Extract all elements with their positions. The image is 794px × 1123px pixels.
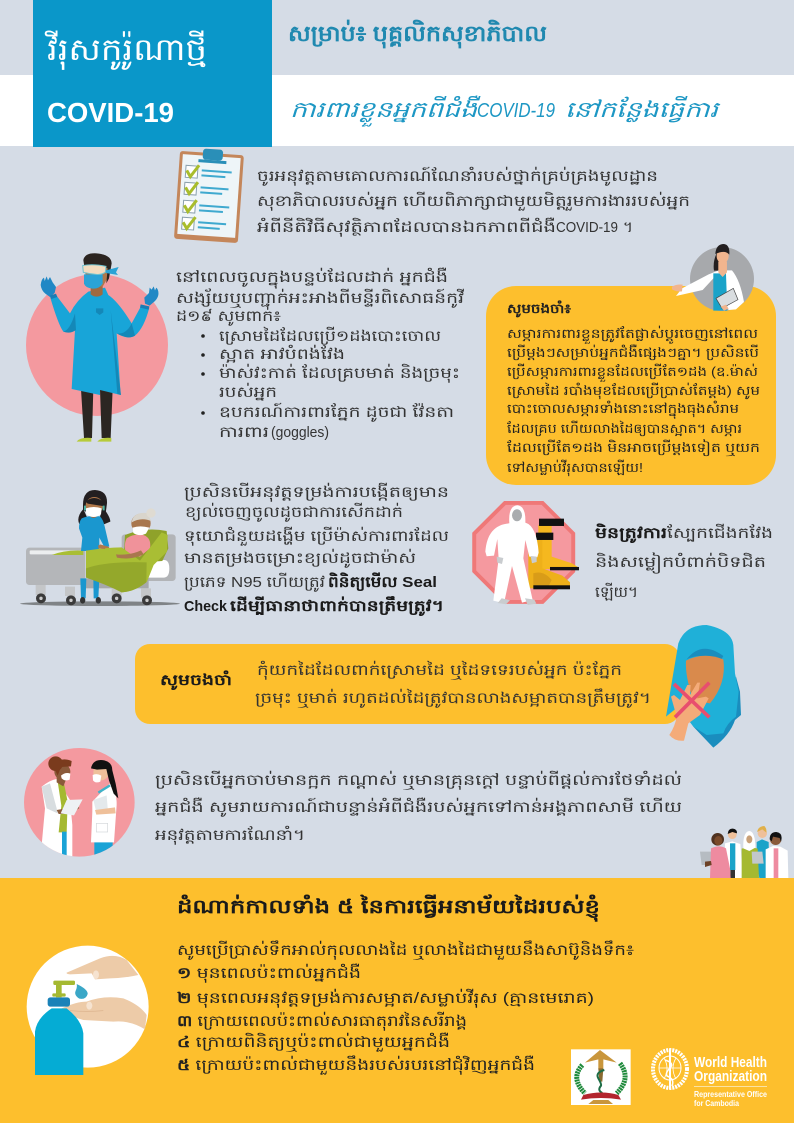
- illustration: woman touching face crossed out: [666, 625, 741, 748]
- bullet list: protective equipment: ការពារ: [219, 424, 269, 441]
- moments list: ២ មុនពេលអនុវត្តទម្រង់ការសម្អាត/សម្លាប់វីរុស (គ្មានមេរោគ): [177, 988, 594, 1008]
- logo: World Health Organization: [653, 1049, 767, 1108]
- bullet list: protective equipment: របស់អ្នក: [219, 382, 277, 401]
- text block: aerosol generating procedures: Check: [184, 598, 228, 615]
- subtitle: protect yourself at work: ការពារខ្លួនអ្នកពីជំងឺ: [290, 95, 481, 127]
- callout text: ស្រោមដៃ របាំងមុខដែលប្រើប្រាស់តែម្តង) សូម: [507, 382, 760, 400]
- title panel: [33, 0, 272, 147]
- text block: aerosol generating procedures: ដើម្បីធានាថាពាក់បានត្រឹមត្រូវ។: [230, 596, 444, 617]
- moments list: ៤ ក្រោយពិនិត្យឬប៉ះពាល់ជាមួយអ្នកជំងឺ: [177, 1032, 450, 1052]
- text block: follow guidance: ។: [623, 219, 633, 236]
- bullet list: protective equipment: ឧបករណ៍ការពារភ្នែក ដូចជា វ៉ែនតា: [219, 402, 454, 422]
- text block: follow guidance: សុខាភិបាលរបស់អ្នក ហើយពិភាក្សាជាមួយមិត្តរួមការងាររបស់អ្នក: [257, 191, 690, 211]
- subtitle: protect yourself at work: [290, 95, 720, 127]
- text block: entering the room: ដ១៩ សូមពាក់៖: [176, 306, 281, 326]
- callout text: ច្រមុះ ឬមាត់ រហូតដល់ដៃត្រូវបានលាងសម្អាតបានត្រឹមត្រូវ។: [255, 688, 651, 708]
- illustration: health worker in gown: [26, 253, 168, 442]
- logo: Ministry of Health: [571, 1049, 631, 1105]
- title: new coronavirus: វីរុសកូរ៉ូណាថ្មី: [45, 30, 207, 70]
- subtitle: protect yourself at work: COVID-19: [477, 100, 555, 122]
- callout text: ប្រើសម្ភារការពារខ្លួនដែលប្រើតែ១ដង (ឧ.ម៉ាស់: [507, 363, 758, 382]
- callout text: ដែលប្រើតែ១ដង មិនអាចប្រើម្តងទៀត ឬយក: [507, 439, 760, 457]
- bullet list: protective equipment: (goggles): [271, 424, 329, 441]
- text block: aerosol generating procedures: ប្រសិនបើអនុវត្តទម្រង់ការបង្កើតឲ្យមាន: [184, 482, 449, 502]
- illustration: hand sanitizer: [27, 946, 149, 1075]
- logo: World Health Organization: World Health: [694, 1054, 767, 1071]
- title: COVID-19: COVID-19: [47, 97, 174, 128]
- bullet list: protective equipment: ម៉ាស់វះកាត់ ដែលគ្របមាត់ និងច្រមុះ: [219, 363, 460, 383]
- subtitle: audience: សម្រាប់៖ បុគ្គលិកសុខាភិបាល: [288, 19, 547, 49]
- subtitle: protect yourself at work: នៅកន្លែងធ្វើការ: [565, 96, 720, 123]
- logo: World Health Organization: Organization: [694, 1068, 767, 1085]
- bullet list: protective equipment: ស្អាត អាវបំពង់វែង: [219, 344, 345, 363]
- callout label: សូមចងចាំ: [160, 670, 232, 691]
- icon: clipboard checklist: [174, 147, 244, 243]
- illustration: group of health workers: [700, 826, 788, 878]
- text block: aerosol generating procedures: ប្រភេទ N95 ហើយត្រូវ: [184, 572, 325, 592]
- moments list: ៥ ក្រោយប៉ះពាល់ជាមួយនឹងរបស់របរនៅជុំវិញអ្នកជំងឺ: [177, 1055, 535, 1075]
- callout text: សម្ភារការពារខ្លួនត្រូវតែផ្លាស់ប្តូរចេញនៅពេល: [507, 325, 758, 344]
- moments list: ៣ ក្រោយពេលប៉ះពាល់សារធាតុរាវនៃសរីរាង្គ: [177, 1011, 467, 1031]
- footer heading: five moments of hand hygiene: ដំណាក់កាលទាំង ៥ នៃការធ្វើអនាម័យដៃរបស់ខ្ញុំ: [177, 894, 600, 922]
- text block: follow guidance: អំពីនីតិវិធីសុវត្ថិភាពដែលបានឯកភាពពីជំងឺ: [257, 217, 556, 237]
- callout heading: សូមចងចាំ៖: [507, 300, 571, 318]
- logo: World Health Organization: Representative Office: [694, 1090, 767, 1099]
- text block: no boots or coverall: មិនត្រូវការ: [595, 523, 667, 544]
- callout text: ប្រើម្តងៗសម្រាប់អ្នកជំងឺផ្សេងៗគ្នា។ ប្រសិនបើ: [507, 344, 759, 361]
- callout text: ដែលគ្រប ហើយលាងដៃឲ្យបានស្អាត។ សម្ភារ: [507, 420, 742, 437]
- text block: entering the room: សង្ស័យឬបញ្ជាក់អះអាងពីមន្ទីរពិសោធន៍កូវី: [176, 288, 464, 308]
- text block: no boots or coverall: [595, 523, 773, 601]
- callout text: [507, 325, 760, 477]
- text block: follow guidance: [257, 166, 690, 237]
- text block: report symptoms: អ្នកជំងឺ សូមរាយការណ៍ជាបន្ទាន់អំពីជំងឺរបស់អ្នកទៅកាន់អង្គភាពសាមី ហើយ: [155, 797, 682, 817]
- illustration: two health workers: [24, 748, 135, 860]
- text block: report symptoms: [155, 770, 682, 845]
- text block: follow guidance: ចូរអនុវត្តតាមគោលការណ៍ណែនាំរបស់ថ្នាក់គ្រប់គ្រងមូលដ្ឋាន: [257, 166, 658, 186]
- text block: aerosol generating procedures: មានតម្រងចម្រោះខ្យល់ដូចជាម៉ាស់: [184, 548, 416, 568]
- text block: no boots or coverall: និងសម្លៀកបំពាក់បិទជិត: [595, 552, 766, 574]
- illustration: doctor with clipboard: [672, 244, 754, 311]
- text block: no boots or coverall: ឡើយ។: [595, 582, 638, 601]
- callout text: ទៅសម្លាប់វីរុសបានឡើយ!: [507, 459, 643, 477]
- list intro: សូមប្រើប្រាស់ទឹកអាល់កុលលាងដៃ ឬលាងដៃជាមួយនឹងសាប៊ូនិងទឹក៖: [177, 940, 634, 960]
- text block: entering the room: [176, 267, 464, 441]
- text block: report symptoms: ប្រសិនបើអ្នកចាប់មានក្អក កណ្តាស់ ឬមានគ្រុនក្តៅ បន្ទាប់ពីផ្តល់ការថែទាំដល់: [155, 770, 682, 790]
- bullet list: protective equipment: ស្រោមដៃដែលប្រើ១ដងបោះចោល: [219, 326, 441, 345]
- text block: follow guidance: COVID-19: [556, 219, 618, 236]
- text block: aerosol generating procedures: ពិនិត្យមើល Seal: [328, 572, 437, 591]
- footer panel: [0, 878, 794, 1123]
- text block: aerosol generating procedures: ខ្យល់ចេញចូលដូចជាការសើកដាក់: [185, 502, 403, 522]
- callout text: [255, 660, 651, 708]
- moments list: [177, 963, 594, 1075]
- icon: stop sign with coverall and boots: [474, 503, 579, 605]
- text block: report symptoms: អនុវត្តតាមការណែនាំ។: [155, 825, 305, 845]
- text block: entering the room: នៅពេលចូលក្នុងបន្ទប់ដែលដាក់ អ្នកជំងឺ: [176, 267, 448, 289]
- text block: no boots or coverall: ស្បែកជើងកវែង: [667, 523, 773, 542]
- text block: aerosol generating procedures: ទុយោជំនួយដង្ហើម ប្រើម៉ាស់ការពារដែល: [184, 526, 449, 546]
- bullet list: protective equipment: [201, 326, 460, 441]
- text block: aerosol generating procedures: [184, 482, 449, 617]
- callout: remember, PPE: [486, 286, 776, 485]
- callout text: បោះចោលសម្ភារទាំងនោះនៅក្នុងធុងសំរាម: [507, 400, 739, 419]
- callout text: កុំយកដៃដែលពាក់ស្រោមដៃ ឬដៃទទេរបស់អ្នក ប៉ះភ្នែក: [257, 660, 622, 680]
- illustration: nurse with patient in bed: [20, 490, 180, 606]
- callout: do not touch face: [135, 644, 680, 724]
- logo: World Health Organization: for Cambodia: [694, 1099, 739, 1108]
- moments list: ១ មុនពេលប៉ះពាល់អ្នកជំងឺ: [177, 963, 361, 983]
